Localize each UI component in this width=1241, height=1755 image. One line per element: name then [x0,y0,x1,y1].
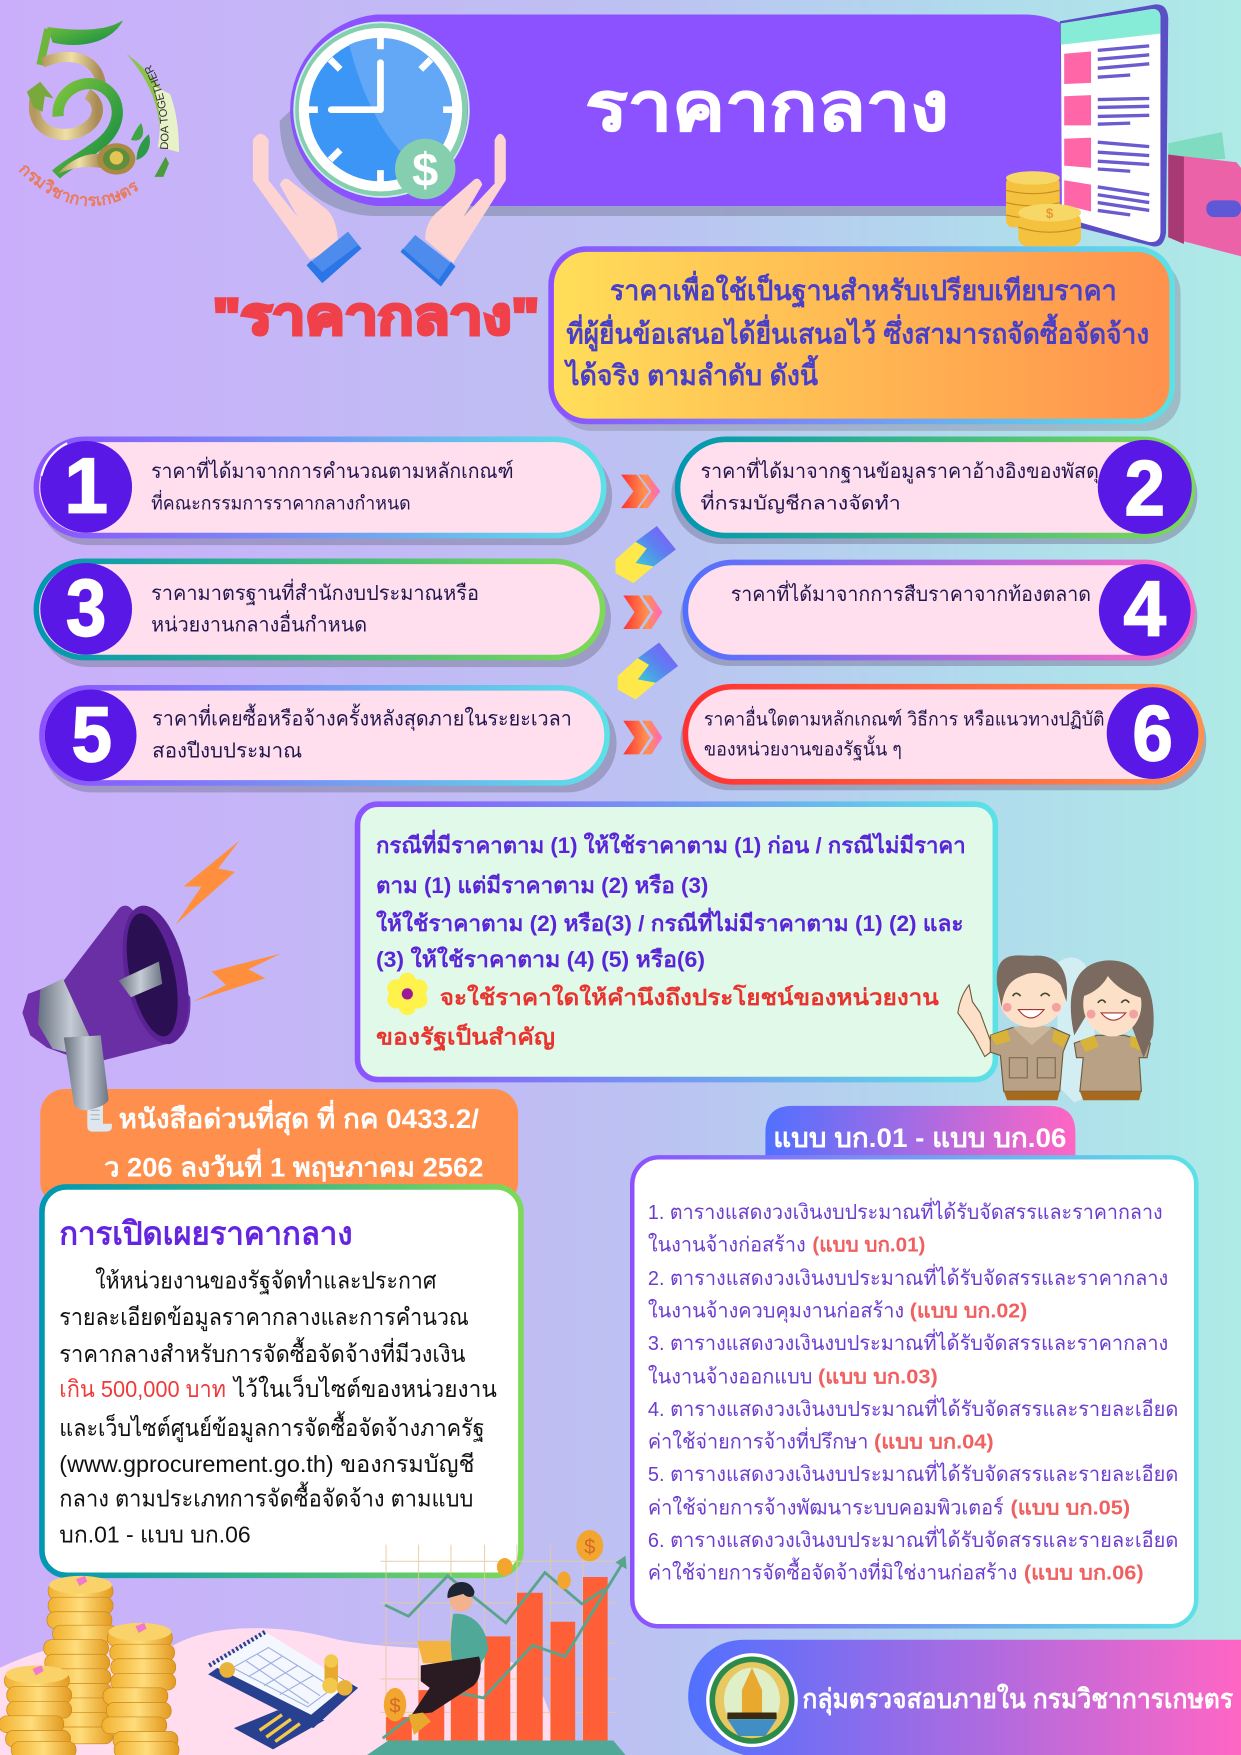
item 6 [680,687,1206,790]
item 1: ราคาที่ได้มาจากการคำนวณตามหลักเกณฑ์ [151,457,514,483]
illustration: two officials [958,955,1154,1102]
panel: selection conditions: จะใช้ราคาใดให้คำนึงถึงประโยชน์ของหน่วยงาน [440,984,940,1010]
icon: yellow flower [387,973,427,1015]
panel: selection conditions: (3) ให้ใช้ราคาตาม (4) (5) หรือ(6) [376,946,705,972]
panel: urgent letter reference: หนังสือด่วนที่สุด ที่ กค 0433.2/ [119,1099,479,1136]
item 6: 6 [1132,689,1173,777]
item 2: ราคาที่ได้มาจากฐานข้อมูลราคาอ้างอิงของพัสดุ [701,457,1099,484]
panel: forms list: (แบบ บก.06) [1024,1561,1144,1584]
panel: forms list: (แบบ บก.01) [812,1233,925,1256]
panel: price disclosure: บก.01 - แบบ บก.06 [59,1521,251,1547]
tab: form range: แบบ บก.01 - แบบ บก.06 [773,1123,1066,1153]
person working on a laptop [408,1582,488,1735]
logo: DOA 50 years [18,20,180,206]
heading: red quote title: "ราคากลาง" [213,288,539,345]
icon: phone, wallet and coins [1006,4,1241,256]
icon: clock with dollar coin: $ [412,143,438,196]
panel: definition: ราคาเพื่อใช้เป็นฐานสำหรับเปรียบเทียบราคา [610,270,1117,309]
item 5: 5 [72,690,112,778]
logo: DOA 50 years: กรมวิชาการเกษตร [18,165,138,206]
panel: definition: ได้จริง ตามลำดับ ดังนี้ [563,354,819,391]
panel: forms list: ค่าใช้จ่ายการจัดซื้อจัดจ้างที่มิใช่งานก่อสร้าง [648,1557,1017,1584]
panel: price disclosure: (www.gprocurement.go.th) ของกรมบัญชี [59,1451,474,1478]
panel: forms list: 4. ตารางแสดงวงเงินงบประมาณที่ได้รับจัดสรรและรายละเอียด [648,1395,1178,1421]
item 3: ราคามาตรฐานที่สำนักงบประมาณหรือ [151,579,479,605]
panel: forms list: (แบบ บก.05) [1010,1496,1130,1519]
illustration: calendar and card [208,1632,358,1749]
icon: lightning bolts [176,841,281,1002]
panel: forms list: 3. ตารางแสดงวงเงินงบประมาณที่ได้รับจัดสรรและราคากลาง [648,1329,1168,1355]
arrow: first row chevrons [621,475,660,508]
tab: form range [765,1106,1075,1164]
panel: forms list: ในงานจ้างก่อสร้าง [648,1232,806,1256]
panel: price disclosure: ราคากลางสำหรับการจัดซื้อจัดจ้างที่มีวงเงิน [59,1337,466,1367]
panel: forms list: (แบบ บก.02) [910,1299,1027,1322]
panel: forms list: (แบบ บก.04) [874,1430,994,1453]
panel: price disclosure: และเว็บไซต์ศูนย์ข้อมูลการจัดซื้อจัดจ้างภาครัฐ [59,1411,485,1443]
bar chart with person: $ [389,1695,401,1717]
panel: selection conditions: ให้ใช้ราคาตาม (2) หรือ(3) / กรณีที่ไม่มีราคาตาม (1) (2) และ [376,907,963,936]
icon: department emblem [706,1653,798,1747]
item 5: สองปีงบประมาณ [152,740,302,763]
megaphone handle overlapping the letter panel [64,1035,109,1110]
title banner [280,15,1063,216]
pink hill behind bottom illustrations [0,1628,560,1755]
item 1 [36,439,612,545]
panel: price disclosure: เกิน 500,000 บาท [59,1376,226,1402]
panel: forms list: 5. ตารางแสดงวงเงินงบประมาณที่ได้รับจัดสรรและรายละเอียด [648,1460,1178,1486]
bar chart with person [367,1530,627,1755]
panel: forms list: ในงานจ้างออกแบบ [648,1364,812,1388]
panel: price disclosure: ให้หน่วยงานของรัฐจัดทำและประกาศ [95,1267,436,1294]
panel: urgent letter reference [40,1089,518,1207]
item 1: ที่คณะกรรมการราคากลางกำหนด [151,489,411,514]
panel: forms list: (แบบ บก.03) [818,1365,938,1388]
item 3: หน่วยงานกลางอื่นกำหนด [151,610,367,636]
item 1: 1 [64,442,108,530]
panel: selection conditions: ตาม (1) แต่มีราคาตาม (2) หรือ (3) [376,873,708,898]
panel: price disclosure: รายละเอียดข้อมูลราคากลางและการคำนวณ [59,1304,469,1332]
item 5 [42,688,617,792]
item 2 [671,439,1197,544]
arrow: third row chevrons [623,721,662,754]
icon: phone, wallet and coins: $ [1046,206,1054,221]
footer band [688,1640,1241,1755]
panel: selection conditions: กรณีที่มีราคาตาม (1) ให้ใช้ราคาตาม (1) ก่อน / กรณีไม่มีราคา [376,829,966,858]
panel: forms list: 2. ตารางแสดงวงเงินงบประมาณที่ได้รับจัดสรรและราคากลาง [648,1264,1168,1290]
arrow: first down-left chevron [615,526,676,583]
panel: price disclosure: การเปิดเผยราคากลาง [59,1216,352,1252]
item 4: ราคาที่ได้มาจากการสืบราคาจากท้องตลาด [731,580,1091,606]
bar chart with person: $ [584,1537,595,1559]
item 3: 3 [66,564,106,654]
panel: urgent letter reference: ว 206 ลงวันที่ 1 พฤษภาคม 2562 [104,1147,483,1182]
item 2: 2 [1125,444,1165,532]
item 6: ของหน่วยงานของรัฐนั้น ๆ [704,735,902,761]
panel: forms list: ในงานจ้างควบคุมงานก่อสร้าง [648,1298,904,1323]
panel: selection conditions: ของรัฐเป็นสำคัญ [376,1022,555,1051]
item 3 [36,561,611,667]
item 4 [680,562,1197,666]
panel: definition [551,249,1181,431]
panel: selection conditions [358,804,995,1080]
item 6: ราคาอื่นใดตามหลักเกณฑ์ วิธีการ หรือแนวทางปฏิบัติ [704,705,1104,730]
item 5: ราคาที่เคยซื้อหรือจ้างครั้งหลังสุดภายในระยะเวลา [152,703,572,731]
panel: forms list [632,1157,1196,1626]
item 4: 4 [1124,565,1166,653]
panel: price disclosure: ไว้ในเว็บไซต์ของหน่วยงาน [232,1374,497,1402]
panel: forms list: ค่าใช้จ่ายการจ้างพัฒนาระบบคอมพิวเตอร์ [648,1495,1004,1519]
icon: megaphone [22,900,200,1063]
icon: cupped hands [253,134,506,287]
panel: forms list: 6. ตารางแสดงวงเงินงบประมาณที่ได้รับจัดสรรและรายละเอียด [648,1526,1178,1552]
banner title text: ราคากลาง [585,70,949,145]
panel: forms list: 1. ตารางแสดงวงเงินงบประมาณที่ได้รับจัดสรรและราคากลาง [648,1198,1163,1224]
illustration: stacks of gold coins [0,1576,179,1755]
panel: price disclosure [42,1187,521,1575]
arrow: second down-left chevron [618,642,678,700]
item 2: ที่กรมบัญชีกลางจัดทำ [701,489,901,514]
panel: price disclosure: กลาง ตามประเภทการจัดซื้อจัดจ้าง ตามแบบ [59,1482,473,1512]
icon: clock with dollar coin [293,22,469,199]
arrow: second row chevrons [623,595,662,629]
logo: DOA 50 years: DOA TOGETHER [145,64,168,149]
panel: definition: ที่ผู้ยื่นข้อเสนอได้ยื่นเสนอไว้ ซึ่งสามารถจัดซื้อจัดจ้าง [566,313,1149,352]
panel: forms list: ค่าใช้จ่ายการจ้างที่ปรึกษา [648,1427,868,1453]
